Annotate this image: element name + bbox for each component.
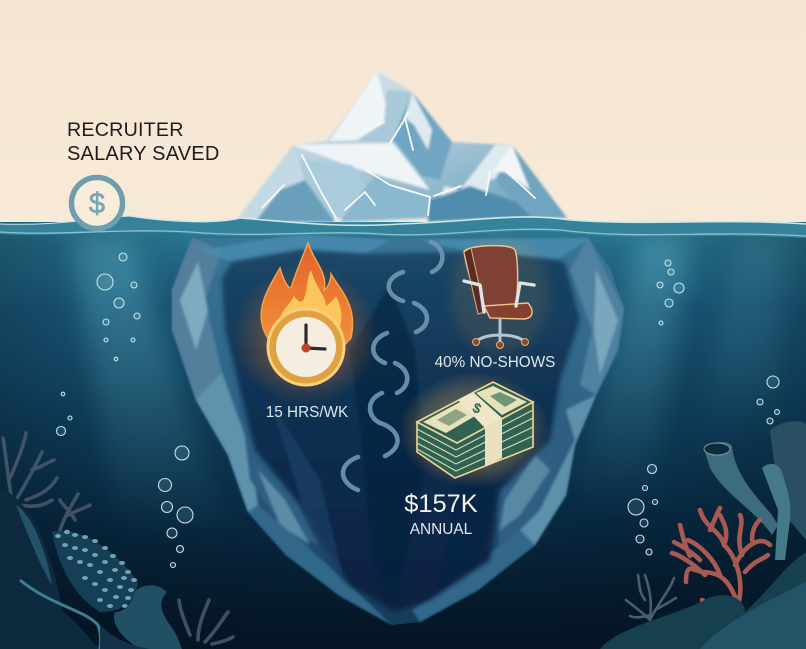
iceberg below water (172, 234, 624, 625)
icon: dollar coin (72, 178, 122, 228)
label: 40 percent no-shows: 40% NO-SHOWS (435, 354, 555, 371)
icon: empty office chair (450, 237, 550, 353)
iceberg infographic scene: SALARY SAVED (67, 143, 219, 165)
coral: left reef (0, 433, 233, 649)
squiggle connectors (343, 242, 442, 490)
coral: right reef (600, 421, 806, 649)
iceberg above water (238, 71, 567, 222)
water surface waves (0, 216, 806, 238)
sky background (0, 0, 806, 240)
icon: stack of cash: $ (470, 399, 484, 417)
icon: dollar coin: $ (89, 188, 105, 220)
value: $157K annual (404, 490, 478, 538)
icon: clock on fire (234, 243, 378, 407)
ocean water (0, 222, 806, 649)
bubbles (56, 253, 779, 568)
icon: stack of cash (398, 372, 550, 488)
value: $157K annual: ANNUAL (410, 521, 473, 538)
value: $157K annual: $157K (404, 490, 478, 518)
iceberg dark core (222, 250, 580, 612)
heading: recruiter salary saved: RECRUITER (67, 119, 184, 141)
label: 15 hrs per week: 15 HRS/WK (266, 404, 349, 421)
